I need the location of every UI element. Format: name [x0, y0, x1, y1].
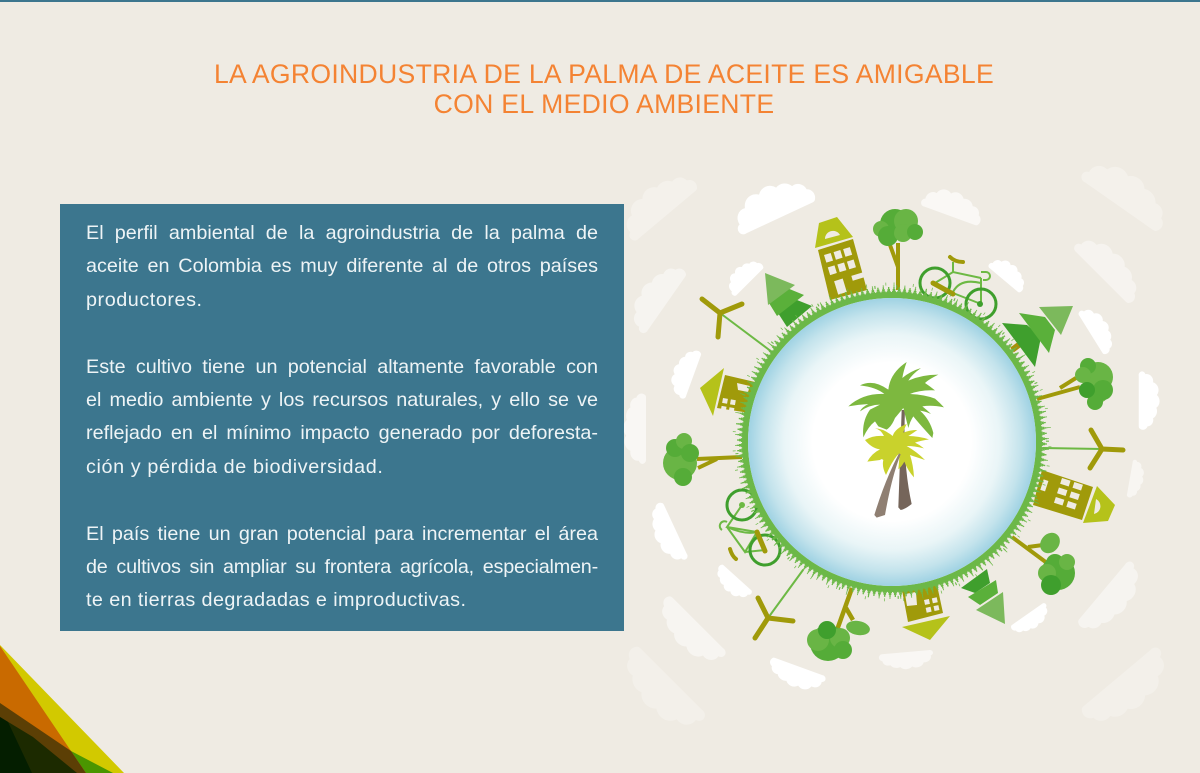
icon: house top — [815, 217, 867, 300]
panel: text block: El país tiene un gran potencial para incrementar el área — [86, 523, 598, 545]
icon: pine top left — [765, 273, 812, 327]
panel: text block: El perfil ambiental de la agroindustria de la palma de — [86, 222, 598, 244]
small palm trunk — [874, 453, 901, 518]
cloud — [987, 252, 1031, 294]
cloud — [611, 644, 707, 741]
icon: tree top — [873, 209, 923, 290]
panel: text block: ción y pérdida de biodiversidad. — [86, 456, 383, 478]
planet globe — [748, 298, 1036, 586]
title: LA AGROINDUSTRIA DE LA PALMA DE ACEITE ES AMIGABLE — [214, 59, 994, 89]
background clouds — [611, 150, 1179, 741]
cloud — [642, 501, 689, 567]
cloud — [721, 254, 765, 297]
cloud — [765, 657, 827, 696]
icon: house bottom — [902, 585, 950, 640]
big palm trunk — [898, 410, 912, 510]
icon: bicycle left — [720, 490, 780, 565]
panel: text block: te en tierras degradadas e improductivas. — [86, 589, 466, 611]
icon: tree lower left — [807, 588, 871, 661]
panel: text block: Este cultivo tiene un potencial altamente favorable con — [86, 356, 598, 378]
icon: tree right — [1037, 358, 1113, 410]
icon: bicycle top — [920, 257, 996, 319]
corner decoration: coloured triangles — [0, 645, 124, 773]
panel: text block: productores. — [86, 289, 203, 311]
small palm crown — [865, 424, 929, 477]
cloud — [613, 163, 699, 243]
icon: tree lower right — [1012, 529, 1075, 595]
icon: pine right — [1002, 306, 1073, 367]
cloud — [1072, 228, 1149, 305]
cloud — [1139, 371, 1160, 430]
icon: house right — [1033, 470, 1115, 523]
icon: tree left — [663, 433, 742, 486]
cloud — [1076, 560, 1151, 641]
icon: windmill right — [1043, 430, 1123, 468]
big palm crown — [848, 362, 944, 438]
panel: text block: reflejado en el mínimo impacto generado por deforesta- — [86, 422, 598, 444]
panel: text block: aceite en Colombia es muy diferente al de otros países — [86, 255, 598, 277]
planet grass ring — [734, 284, 1050, 600]
cloud — [726, 169, 817, 236]
cloud — [621, 257, 688, 335]
icon: house left — [700, 368, 755, 416]
cloud — [1077, 302, 1121, 356]
cloud — [649, 594, 728, 673]
cloud — [879, 650, 934, 672]
top rule — [0, 0, 1200, 2]
icon: pine lower right — [961, 569, 1005, 624]
panel: text block: el medio ambiente y los recursos naturales, y ello se ve — [86, 389, 598, 411]
cloud — [665, 345, 702, 400]
icon: windmill lower left — [755, 570, 803, 638]
cloud — [623, 393, 646, 464]
title — [214, 59, 994, 119]
panel: text block: de cultivos sin ampliar su frontera agrícola, especialmen- — [86, 556, 598, 578]
title: CON EL MEDIO AMBIENTE — [434, 89, 774, 119]
cloud — [1126, 459, 1147, 499]
cloud — [1010, 602, 1054, 639]
cloud — [710, 563, 753, 604]
panel: text block — [60, 204, 624, 631]
cloud — [920, 182, 987, 226]
cloud — [1079, 645, 1179, 737]
icon: palm trees — [848, 362, 944, 518]
icon: windmill top left — [702, 299, 772, 352]
cloud — [1079, 150, 1177, 233]
